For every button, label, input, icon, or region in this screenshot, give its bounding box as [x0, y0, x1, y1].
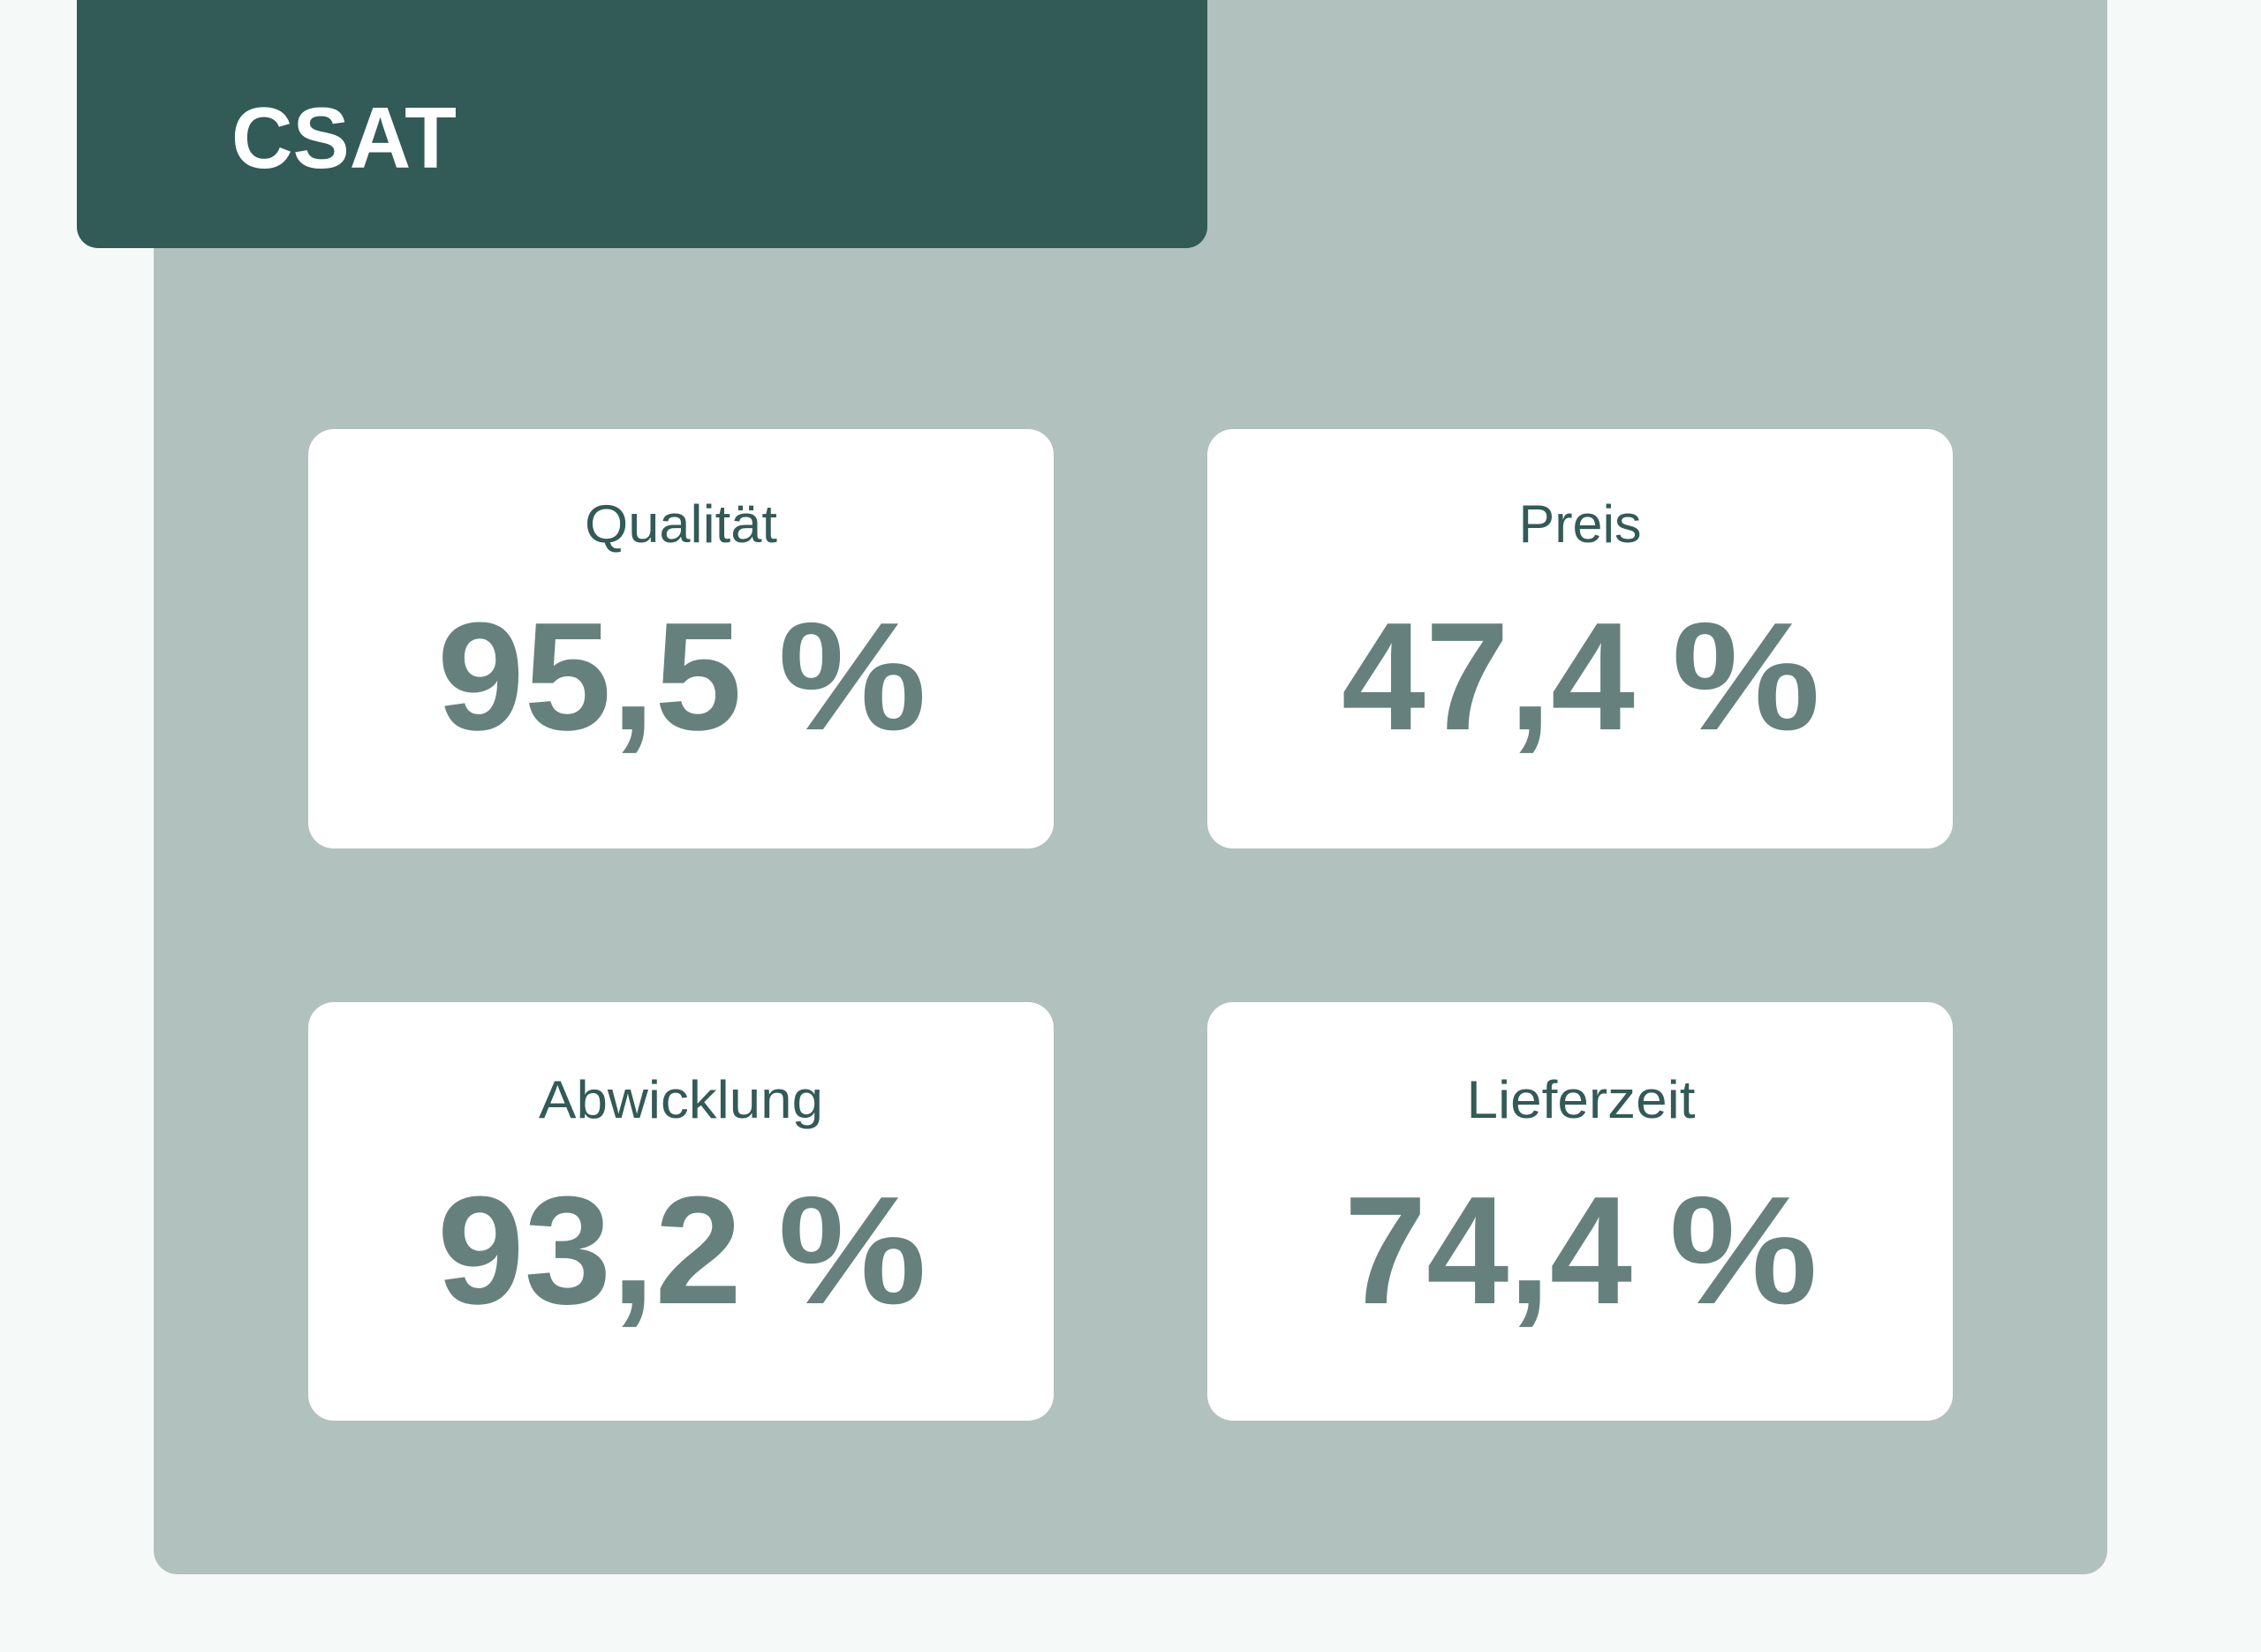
value: 47,4 %: 47,4	[1342, 590, 1635, 762]
card: Lieferzeit	[1207, 1002, 1953, 1421]
label: Qualität: Qualität	[585, 494, 777, 554]
value: 95,5 %: %	[778, 590, 926, 762]
label: Abwicklung: Abwicklung	[539, 1070, 823, 1129]
value: 47,4 %	[1342, 590, 1820, 762]
value: 93,2 %: %	[778, 1164, 926, 1336]
value: 74,4 %	[1344, 1164, 1818, 1336]
title: CSAT	[231, 89, 457, 186]
card: Preis	[1207, 429, 1953, 849]
label: Lieferzeit: Lieferzeit	[1466, 1070, 1696, 1129]
value: 74,4 %: 74,4	[1344, 1164, 1632, 1336]
card: Abwicklung	[308, 1002, 1054, 1421]
value: 95,5 %: 95,5	[437, 590, 742, 762]
value: 93,2 %	[437, 1164, 926, 1336]
value: 74,4 %: %	[1669, 1164, 1818, 1336]
value: 95,5 %	[437, 590, 926, 762]
label: Preis: Preis	[1519, 494, 1641, 554]
header banner with title	[77, 0, 1207, 248]
value: 93,2 %: 93,2	[437, 1164, 742, 1336]
card: Qualität	[308, 429, 1054, 849]
value: 47,4 %: %	[1672, 590, 1820, 762]
